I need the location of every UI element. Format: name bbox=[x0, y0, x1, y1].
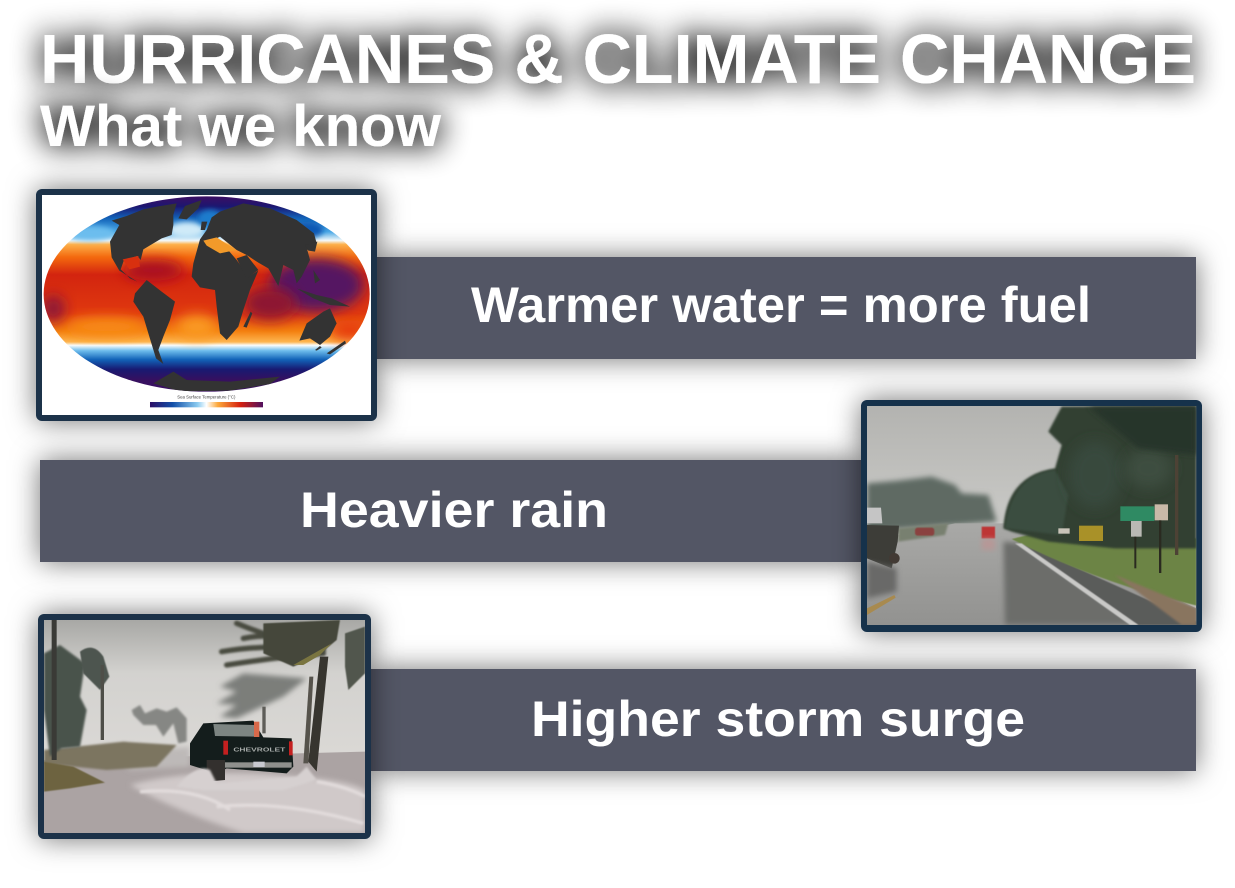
image: truck in flood: CHEVROLET bbox=[233, 748, 287, 754]
panel: storm surge bbox=[38, 614, 1196, 839]
banner: heavier rain bbox=[40, 460, 862, 562]
image: sea surface temperature map bbox=[36, 189, 377, 421]
panel: heavier rain bbox=[40, 400, 1202, 632]
banner: higher storm surge: Higher storm surge bbox=[531, 691, 1025, 747]
banner: heavier rain: Heavier rain bbox=[300, 482, 608, 538]
banner: warmer water: Warmer water = more fuel bbox=[471, 277, 1091, 333]
image: rainy road bbox=[861, 400, 1202, 632]
title: HURRICANES & CLIMATE CHANGE bbox=[40, 20, 1196, 98]
banner: warmer water bbox=[377, 257, 1196, 359]
image: sea surface temperature map: Sea Surface Temperature (°C) bbox=[177, 395, 236, 400]
image: truck in flood bbox=[38, 614, 371, 839]
banner: higher storm surge bbox=[371, 669, 1196, 771]
panel: warmer water bbox=[36, 189, 1196, 421]
subtitle: What we know bbox=[40, 94, 442, 159]
